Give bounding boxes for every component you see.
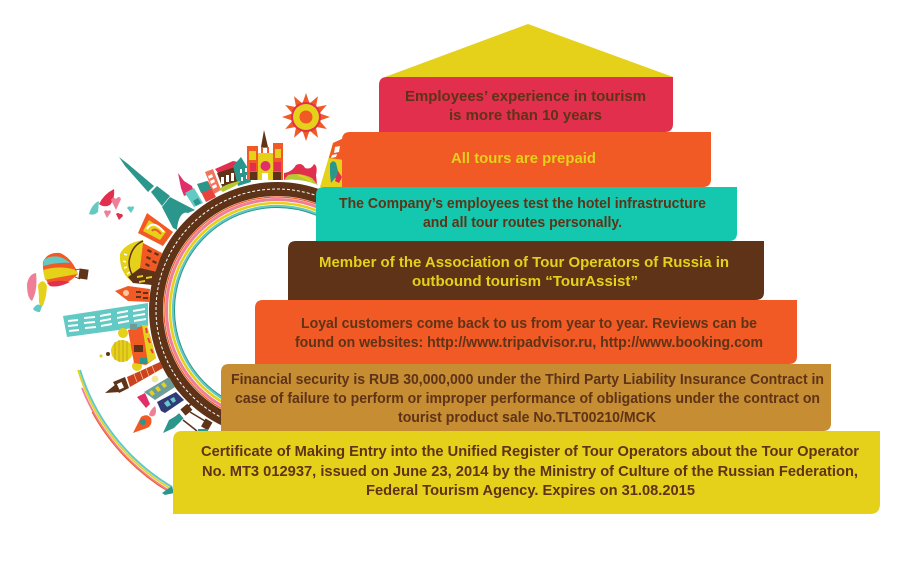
icon: signposts: [163, 400, 212, 433]
icon: hearts and clouds: [89, 189, 134, 220]
panel: association membership: outbound tourism “TourAssist”: [412, 273, 638, 290]
icon: hot air balloon: [27, 253, 89, 312]
icon: garden hills: [284, 164, 318, 185]
panel: loyal customers: found on websites: http://www.tripadvisor.ru, http://www.booking.com: [295, 334, 763, 351]
panel: financial security: tourist product sale No.TLT00210/MCK: [398, 409, 656, 426]
icon: Eiffel tower: [119, 157, 195, 230]
panel: employees experience: [379, 77, 673, 132]
globe rings: [156, 189, 398, 431]
panel: certificate: No. MT3 012937, issued on June 23, 2014 by the Ministry of Culture of the Russian Federation,: [202, 463, 858, 480]
icon: clock tower: [105, 362, 163, 393]
icon: cathedral: [247, 130, 283, 180]
icon: arch building: [138, 213, 173, 246]
panel: employees experience: Employees’ experience in tourism: [405, 88, 646, 105]
panel: prepaid: All tours are prepaid: [451, 150, 596, 167]
panel: loyal customers: [255, 300, 797, 364]
panel: association membership: Member of the Association of Tour Operators of Russia in: [319, 254, 729, 271]
panel: roof: [385, 24, 673, 77]
icon: coloured city blocks: [137, 376, 184, 413]
panel: employees experience: is more than 10 years: [449, 107, 602, 124]
icon: red roof house and teal house: [215, 157, 251, 192]
panel: certificate: Federal Tourism Agency. Expires on 31.08.2015: [366, 482, 695, 499]
panel: certificate: [173, 431, 880, 514]
icon: leaning tower: [63, 303, 148, 337]
panel: financial security: Financial security is RUB 30,000,000 under the Third Party Liability Insurance Contract in: [231, 371, 824, 388]
outer lower rainbow arc: [78, 370, 174, 495]
icon: small town houses: [197, 169, 221, 202]
icon: orange tag house: [115, 286, 150, 302]
panel: financial security: case of failure to perform or improper performance of obligations under the contract on: [235, 390, 820, 407]
panel: hotel testing: The Company’s employees test the hotel infrastructure: [339, 195, 706, 212]
icon: tilted building with figure: [320, 138, 344, 187]
panel: certificate: Certificate of Making Entry into the Unified Register of Tour Operators about the Tour Operator: [201, 443, 859, 460]
panel: financial security: [221, 364, 831, 431]
icon: colosseum: [120, 240, 162, 285]
panel: hotel testing: and all tour routes personally.: [423, 214, 622, 231]
panel: association membership: [288, 241, 764, 300]
panel: prepaid: [342, 132, 711, 187]
panel: hotel testing: [316, 187, 737, 241]
icon: map pin: [133, 406, 156, 433]
icon: church with dome: [178, 173, 203, 207]
icon: sun: [282, 93, 330, 141]
icon: onion dome palace: [100, 324, 156, 371]
panel: loyal customers: Loyal customers come back to us from year to year. Reviews can be: [301, 315, 757, 332]
